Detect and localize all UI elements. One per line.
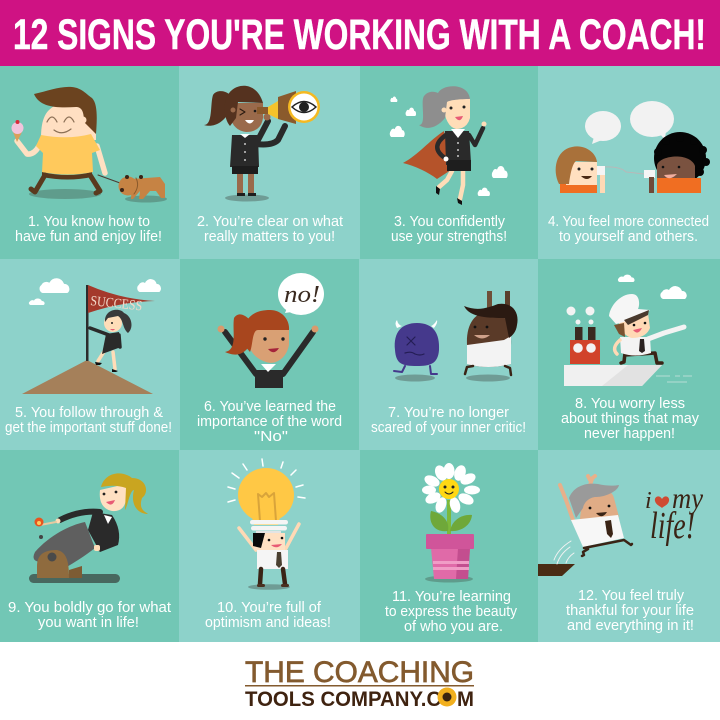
caption 11: to express the beauty: [385, 604, 518, 620]
caption 7: [371, 405, 526, 436]
panel 5: follow through: [0, 259, 180, 450]
caption 6: importance of the word: [197, 414, 342, 430]
logo: The Coaching Tools Company: THE COACHING: [245, 656, 474, 689]
illustration: woman lighting cannon: [29, 473, 148, 583]
icon: sunflower: [438, 688, 456, 706]
caption 2: really matters to you!: [204, 229, 335, 245]
caption 4: 4. You feel more connected: [548, 214, 709, 230]
illustration: two people talking by tin can phone: [556, 101, 710, 193]
caption 3: [391, 214, 507, 245]
caption 3: 3. You confidently: [394, 214, 506, 230]
illustration: man leaping off ledge: [538, 476, 704, 576]
hand lettering: my: [672, 482, 704, 515]
caption 11: [385, 589, 518, 635]
panel 10: optimism: [179, 450, 360, 642]
illustration: woman with raised arms saying no: [218, 273, 324, 388]
caption 4: [548, 214, 709, 245]
caption 5: [5, 405, 172, 436]
logo: The Coaching Tools Company: TOOLS COMPANY.COM: [245, 688, 474, 711]
panel 8: worry less: [538, 259, 720, 450]
caption 1: have fun and enjoy life!: [15, 229, 162, 245]
caption 5: get the important stuff done!: [5, 420, 172, 436]
hand lettering: life!: [650, 505, 695, 547]
panel 9: go for it: [0, 450, 179, 642]
caption 10: optimism and ideas!: [205, 615, 331, 631]
caption 12: thankful for your life: [566, 603, 694, 619]
caption 4: to yourself and others.: [559, 229, 698, 245]
panel 12: thankful: [538, 450, 720, 642]
caption 6: "No": [254, 429, 288, 445]
caption 3: use your strengths!: [391, 229, 507, 245]
illustration: monster and man: [394, 291, 518, 382]
caption 6: 6. You’ve learned the: [204, 399, 336, 415]
caption 2: 2. You’re clear on what: [197, 214, 343, 230]
panel 7: inner critic: [359, 259, 538, 450]
caption 8: never happen!: [584, 426, 675, 442]
caption 1: 1. You know how to: [28, 214, 150, 230]
caption 8: about things that may: [561, 411, 700, 427]
panel 11: beauty: [360, 450, 538, 642]
logo: The Coaching Tools Company: [245, 656, 474, 711]
illustration: captain on ship: [564, 275, 692, 386]
panel 6: no: [180, 259, 359, 450]
caption 8: [561, 396, 700, 442]
caption 7: 7. You’re no longer: [388, 405, 509, 421]
illustration: man with ice cream walking dog: [12, 87, 167, 202]
illustration: woman with telescope: [204, 86, 320, 202]
caption 9: you want in life!: [38, 615, 139, 631]
flag text: SUCCESS: [90, 294, 143, 314]
caption 12: 12. You feel truly: [578, 588, 685, 604]
speech text: no!: [284, 282, 320, 308]
caption 10: [205, 600, 331, 631]
caption 12: [566, 588, 694, 634]
caption 12: and everything in it!: [567, 618, 694, 634]
panel 4: connected: [538, 66, 720, 259]
caption 11: 11. You’re learning: [392, 589, 511, 605]
hand lettering: i: [645, 488, 652, 514]
hand lettering: [645, 482, 704, 547]
illustration: man with light bulb head: [228, 459, 305, 590]
caption 2: [197, 214, 343, 245]
caption 6: [197, 399, 342, 445]
caption 10: 10. You’re full of: [217, 600, 322, 616]
caption 9: [8, 600, 171, 631]
header banner: [0, 0, 720, 66]
illustration: smiling flower in pot: [422, 463, 480, 582]
illustration: caped woman and clouds: [390, 86, 508, 205]
illustration: woman planting success flag on hill: [22, 278, 161, 394]
caption 5: 5. You follow through &: [15, 405, 163, 421]
panel 2: clarity: [179, 66, 360, 259]
caption 1: [15, 214, 162, 245]
caption 11: of who you are.: [404, 619, 503, 635]
panel 3: strengths: [360, 66, 538, 259]
panel 1: fun: [0, 66, 179, 259]
caption 9: 9. You boldly go for what: [8, 600, 171, 616]
caption 8: 8. You worry less: [575, 396, 685, 412]
caption 7: scared of your inner critic!: [371, 420, 526, 436]
